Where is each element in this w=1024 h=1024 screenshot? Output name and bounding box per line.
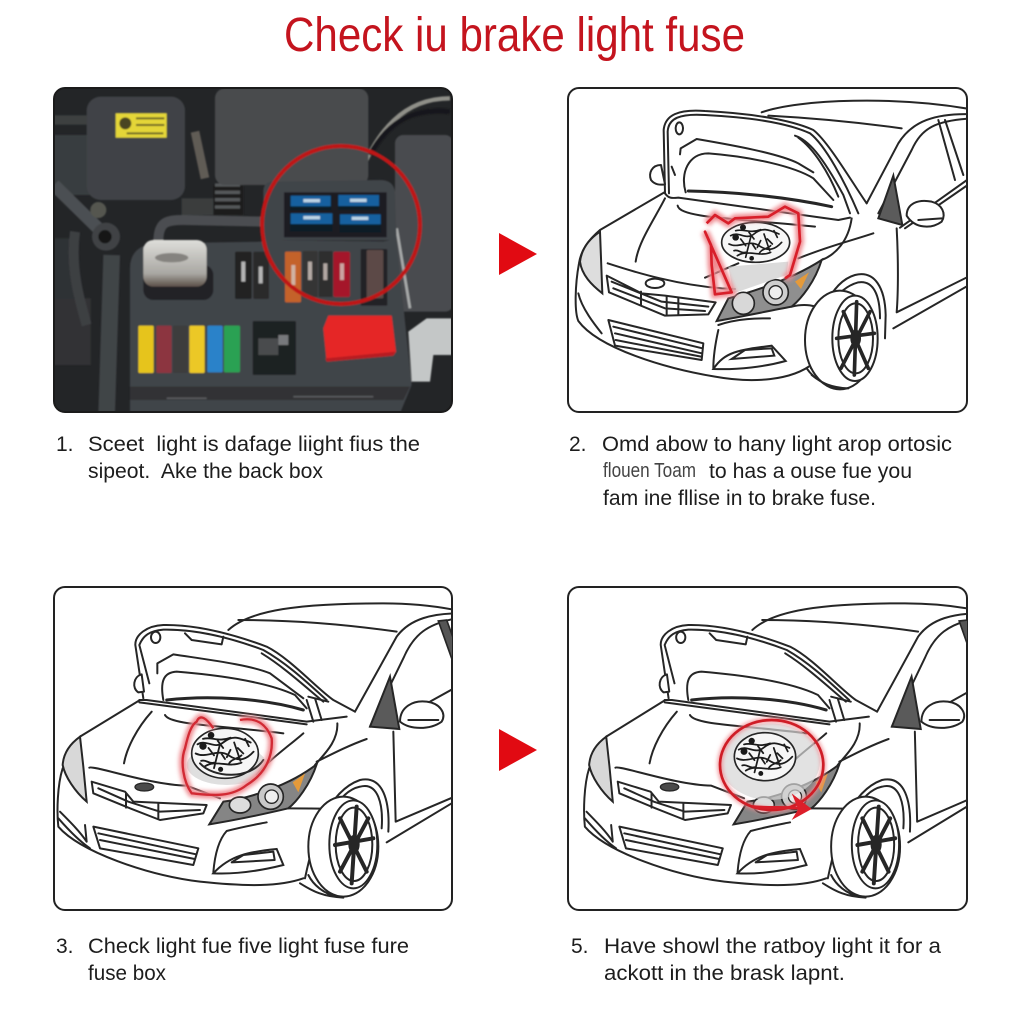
- text block: step 2: Omd abow to hany light arop ortosic: [602, 433, 952, 456]
- red highlight circle: [262, 146, 420, 304]
- text block: step 3: Check light fue five light fuse fure: [88, 935, 409, 958]
- bottom colored fuses: [138, 326, 240, 373]
- text block: step 1: 1.: [56, 433, 74, 456]
- fuse detail spot: [720, 723, 820, 800]
- silver cap: [143, 240, 213, 300]
- yellow warning label: [116, 113, 167, 138]
- blue fuses: [284, 192, 387, 237]
- text block: step 2: 2.: [569, 433, 587, 456]
- text block: step 3: [56, 935, 409, 985]
- arrow: step 1 to step 2: [499, 233, 537, 275]
- panel: car diagram step 5: [568, 587, 981, 910]
- text block: step 3: 3.: [56, 935, 74, 958]
- fuse detail spot: [187, 728, 267, 785]
- text block: step 5: 5.: [571, 935, 589, 958]
- text block: step 5: ackott in the brask lapnt.: [604, 962, 845, 985]
- text block: step 1: sipeot. Ake the back box: [88, 460, 324, 483]
- text block: step 2: flouen Toam: [603, 460, 696, 482]
- text block: step 5: Have showl the ratboy light it for a: [604, 935, 941, 958]
- panel frame: engine photo border: [54, 88, 452, 412]
- arrow: step 3 to step 5: [499, 729, 537, 771]
- text block: step 2: fam ine fllise in to brake fuse.: [603, 487, 876, 510]
- text block: step 2: [569, 433, 952, 510]
- title: Check iu brake light fuse: [284, 9, 745, 62]
- panel: car diagram step 2: [568, 88, 975, 412]
- text block: step 1: [56, 433, 420, 483]
- text block: step 5: [571, 935, 941, 985]
- fuse box body: [130, 180, 412, 413]
- red outline: [705, 207, 800, 294]
- red outline: [183, 717, 272, 795]
- relay block: [253, 321, 296, 375]
- small fuses: [235, 249, 387, 306]
- panel: engine bay photo: [54, 88, 453, 413]
- text block: step 3: fuse box: [88, 962, 166, 985]
- fuse detail spot: [722, 222, 790, 293]
- red cover: [323, 316, 396, 362]
- red circle and arrow: [720, 720, 823, 820]
- text block: step 1: Sceet light is dafage liight fius the: [88, 433, 420, 456]
- text block: step 2: to has a ouse fue you: [709, 460, 912, 483]
- panel: car diagram step 3: [54, 587, 460, 910]
